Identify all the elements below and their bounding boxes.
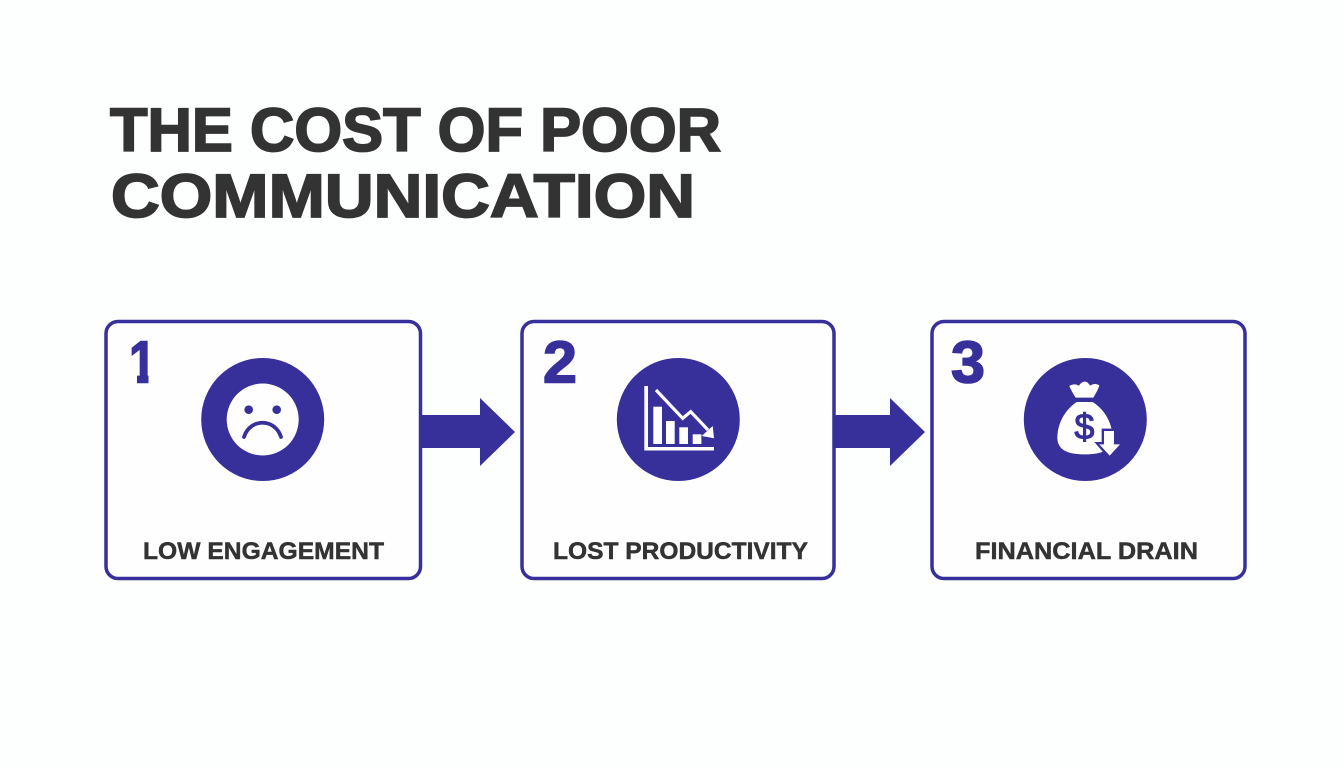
step number 1: 1 [129,330,156,396]
panel: low engagement [106,322,420,578]
label: LOW ENGAGEMENT [143,538,384,565]
panel: lost productivity [522,322,834,578]
card border [522,322,834,578]
arrow: step 1 to step 2 [420,398,515,466]
icon: money bag with down arrow: $ [1074,406,1094,447]
step number 3: 3 [951,330,985,396]
title: COMMUNICATION [111,162,695,230]
label: FINANCIAL DRAIN [975,538,1198,565]
arrow: step 2 to step 3 [834,398,925,466]
icon: sad face [201,358,324,481]
card border [106,322,420,578]
label: LOST PRODUCTIVITY [553,538,808,565]
icon: money bag with down arrow [1024,358,1147,481]
card border [932,322,1245,578]
title [110,96,721,230]
panel: financial drain [932,322,1245,578]
title: THE COST OF POOR [110,96,721,164]
step number 2: 2 [543,330,577,396]
icon: declining bar chart [617,358,740,481]
